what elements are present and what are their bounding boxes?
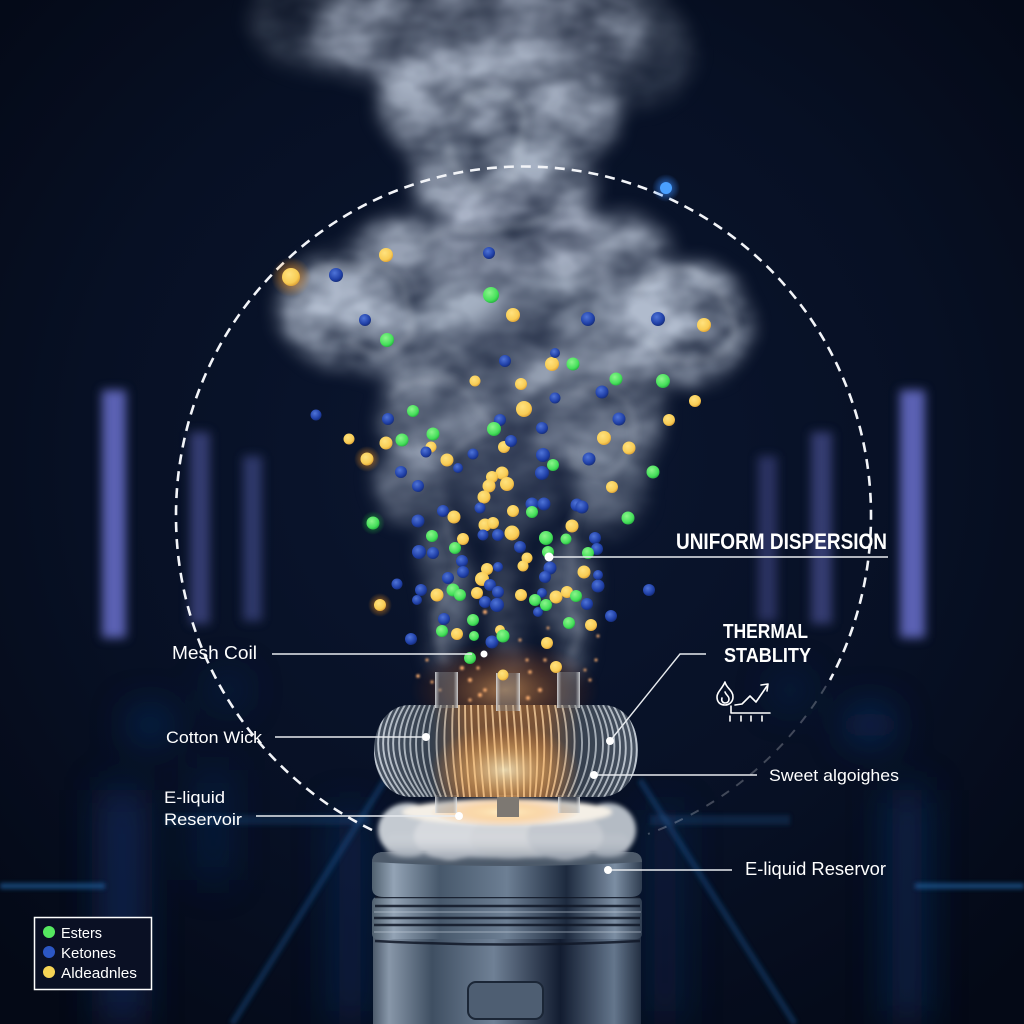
label: e-liquid reservoir left bbox=[164, 788, 242, 829]
esters (green molecules) bbox=[380, 287, 670, 664]
legend: ketones: Ketones bbox=[61, 945, 116, 962]
label: cotton wick: Cotton Wick bbox=[166, 728, 263, 747]
top collar bbox=[372, 852, 642, 897]
icon: flame and rising chart bbox=[717, 682, 770, 721]
aldehydes (yellow molecules) bbox=[344, 248, 711, 649]
coil stems below bbox=[435, 795, 580, 817]
label: thermal stability: THERMAL bbox=[723, 621, 808, 643]
e-liquid reservoir body bbox=[372, 852, 642, 1024]
label: e-liquid reservoir left: E-liquid bbox=[164, 788, 225, 807]
mesh coil bbox=[374, 705, 638, 797]
label: e-liquid reservoir left: Reservoir bbox=[164, 810, 242, 829]
label: thermal stability: STABLITY bbox=[724, 645, 812, 667]
cotton wick bbox=[378, 797, 636, 860]
label: thermal stability bbox=[723, 621, 812, 667]
legend: esters: Esters bbox=[61, 925, 102, 942]
legend: aldehydes: Aldeadnles bbox=[61, 965, 137, 982]
label: e-liquid reservor right: E-liquid Reservor bbox=[745, 859, 886, 879]
molecules on tubes bbox=[498, 661, 562, 680]
label: uniform dispersion: UNIFORM DISPERSION bbox=[676, 529, 887, 554]
glowing molecules bbox=[215, 174, 710, 617]
ketones (blue molecules) bbox=[310, 247, 665, 648]
label: sweet algoighes: Sweet algoighes bbox=[769, 766, 899, 785]
label: mesh coil: Mesh Coil bbox=[172, 643, 257, 663]
device window bbox=[468, 982, 543, 1019]
callout lines bbox=[256, 557, 888, 870]
legend bbox=[34, 918, 152, 990]
callout dots bbox=[422, 552, 614, 874]
glass tubes bbox=[435, 672, 580, 711]
fire glow and sparks bbox=[410, 610, 600, 740]
smoke plume bbox=[250, 0, 752, 675]
dashed dispersion circle bbox=[176, 166, 871, 834]
collar top face bbox=[372, 852, 642, 866]
